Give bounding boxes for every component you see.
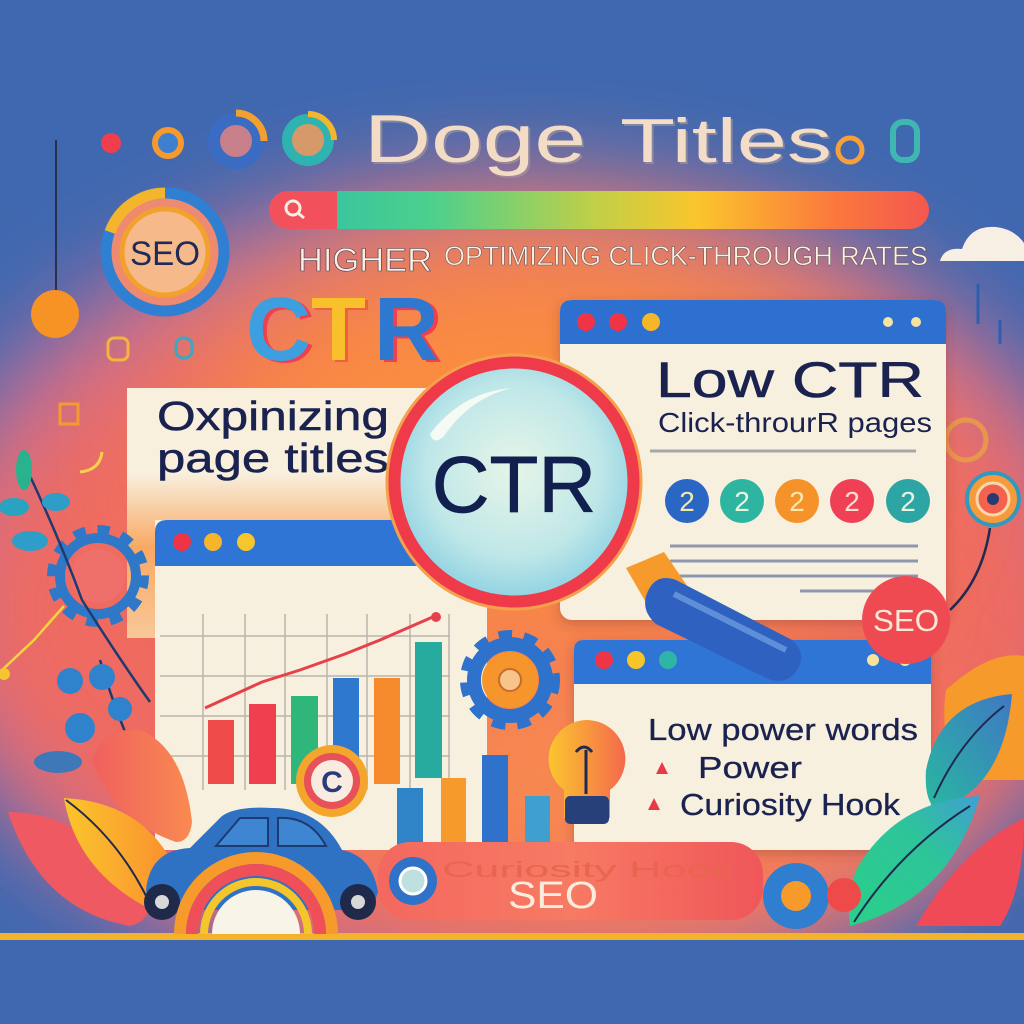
- title: Titles: [622, 109, 834, 178]
- panel: power words: Low power words: [648, 712, 918, 747]
- CTR heading: T: [311, 280, 366, 380]
- gear center: [466, 636, 554, 724]
- CTR heading: R: [378, 282, 443, 382]
- target icon right: [950, 473, 1019, 610]
- CTR heading: R: [374, 280, 439, 380]
- panel: power words: Curiosity Hook: [680, 787, 901, 822]
- numbered badges: 2: [789, 486, 805, 517]
- panel: optimizing page titles: Oxpinizing: [157, 393, 389, 439]
- CTR heading: T: [314, 282, 369, 382]
- title: [364, 101, 917, 179]
- numbered badges: 2: [734, 486, 750, 517]
- panel: chart window: [155, 520, 487, 850]
- icon: C badge: [296, 745, 368, 817]
- icon: light bulb: [549, 720, 625, 824]
- panel: low CTR: Low CTR: [656, 352, 924, 408]
- small floating marks: [60, 284, 1000, 472]
- numbered badges: 2: [900, 486, 916, 517]
- SEO badge right: SEO: [873, 603, 939, 638]
- icon: gear left: [52, 530, 144, 622]
- cloud: [940, 227, 1024, 261]
- rainbow arch: [180, 858, 332, 934]
- panel: low CTR: [560, 300, 946, 620]
- SEO pill: [378, 842, 763, 920]
- search bar: [269, 191, 929, 229]
- title: Doge: [364, 101, 586, 177]
- decorative rings row: [101, 113, 334, 163]
- title: Titles: [620, 107, 832, 176]
- icon: magnifying glass: [387, 355, 801, 681]
- bar chart: [160, 612, 450, 790]
- SEO pill: SEO: [508, 875, 598, 917]
- leaves bottom-left: [8, 730, 192, 926]
- icon: C badge: C: [321, 766, 343, 799]
- panel: optimizing page titles: [127, 388, 447, 638]
- CTR heading: C: [246, 280, 311, 380]
- subtitle: HIGHER: [298, 242, 432, 278]
- icon: magnifying glass: CTR: [432, 440, 596, 529]
- CTR heading: [246, 280, 443, 382]
- lower bars: [397, 755, 550, 848]
- icon: orange dot ring: [763, 863, 861, 929]
- numbered badges: [665, 479, 930, 523]
- leaves bottom-right: [849, 655, 1024, 926]
- panel: optimizing page titles: page titles: [157, 435, 389, 481]
- baseline stripe: [0, 933, 1024, 940]
- SEO pill: Curiosity Hook: [442, 857, 736, 882]
- title: Doge: [366, 103, 588, 179]
- subtitle: OPTIMIZING CLICK-THROUGH RATES: [444, 241, 928, 271]
- panel: power words: Power: [698, 750, 802, 785]
- SEO ring: SEO: [130, 235, 200, 273]
- car: [144, 808, 378, 920]
- panel: power words: [574, 640, 931, 850]
- subtitle: [298, 241, 928, 278]
- SEO ring: [31, 140, 224, 338]
- plants left: [0, 450, 168, 812]
- CTR heading: C: [250, 282, 315, 382]
- panel: low CTR: Click-throurR pages: [658, 407, 932, 438]
- SEO badge right: [862, 576, 950, 664]
- numbered badges: 2: [679, 486, 695, 517]
- numbered badges: 2: [844, 486, 860, 517]
